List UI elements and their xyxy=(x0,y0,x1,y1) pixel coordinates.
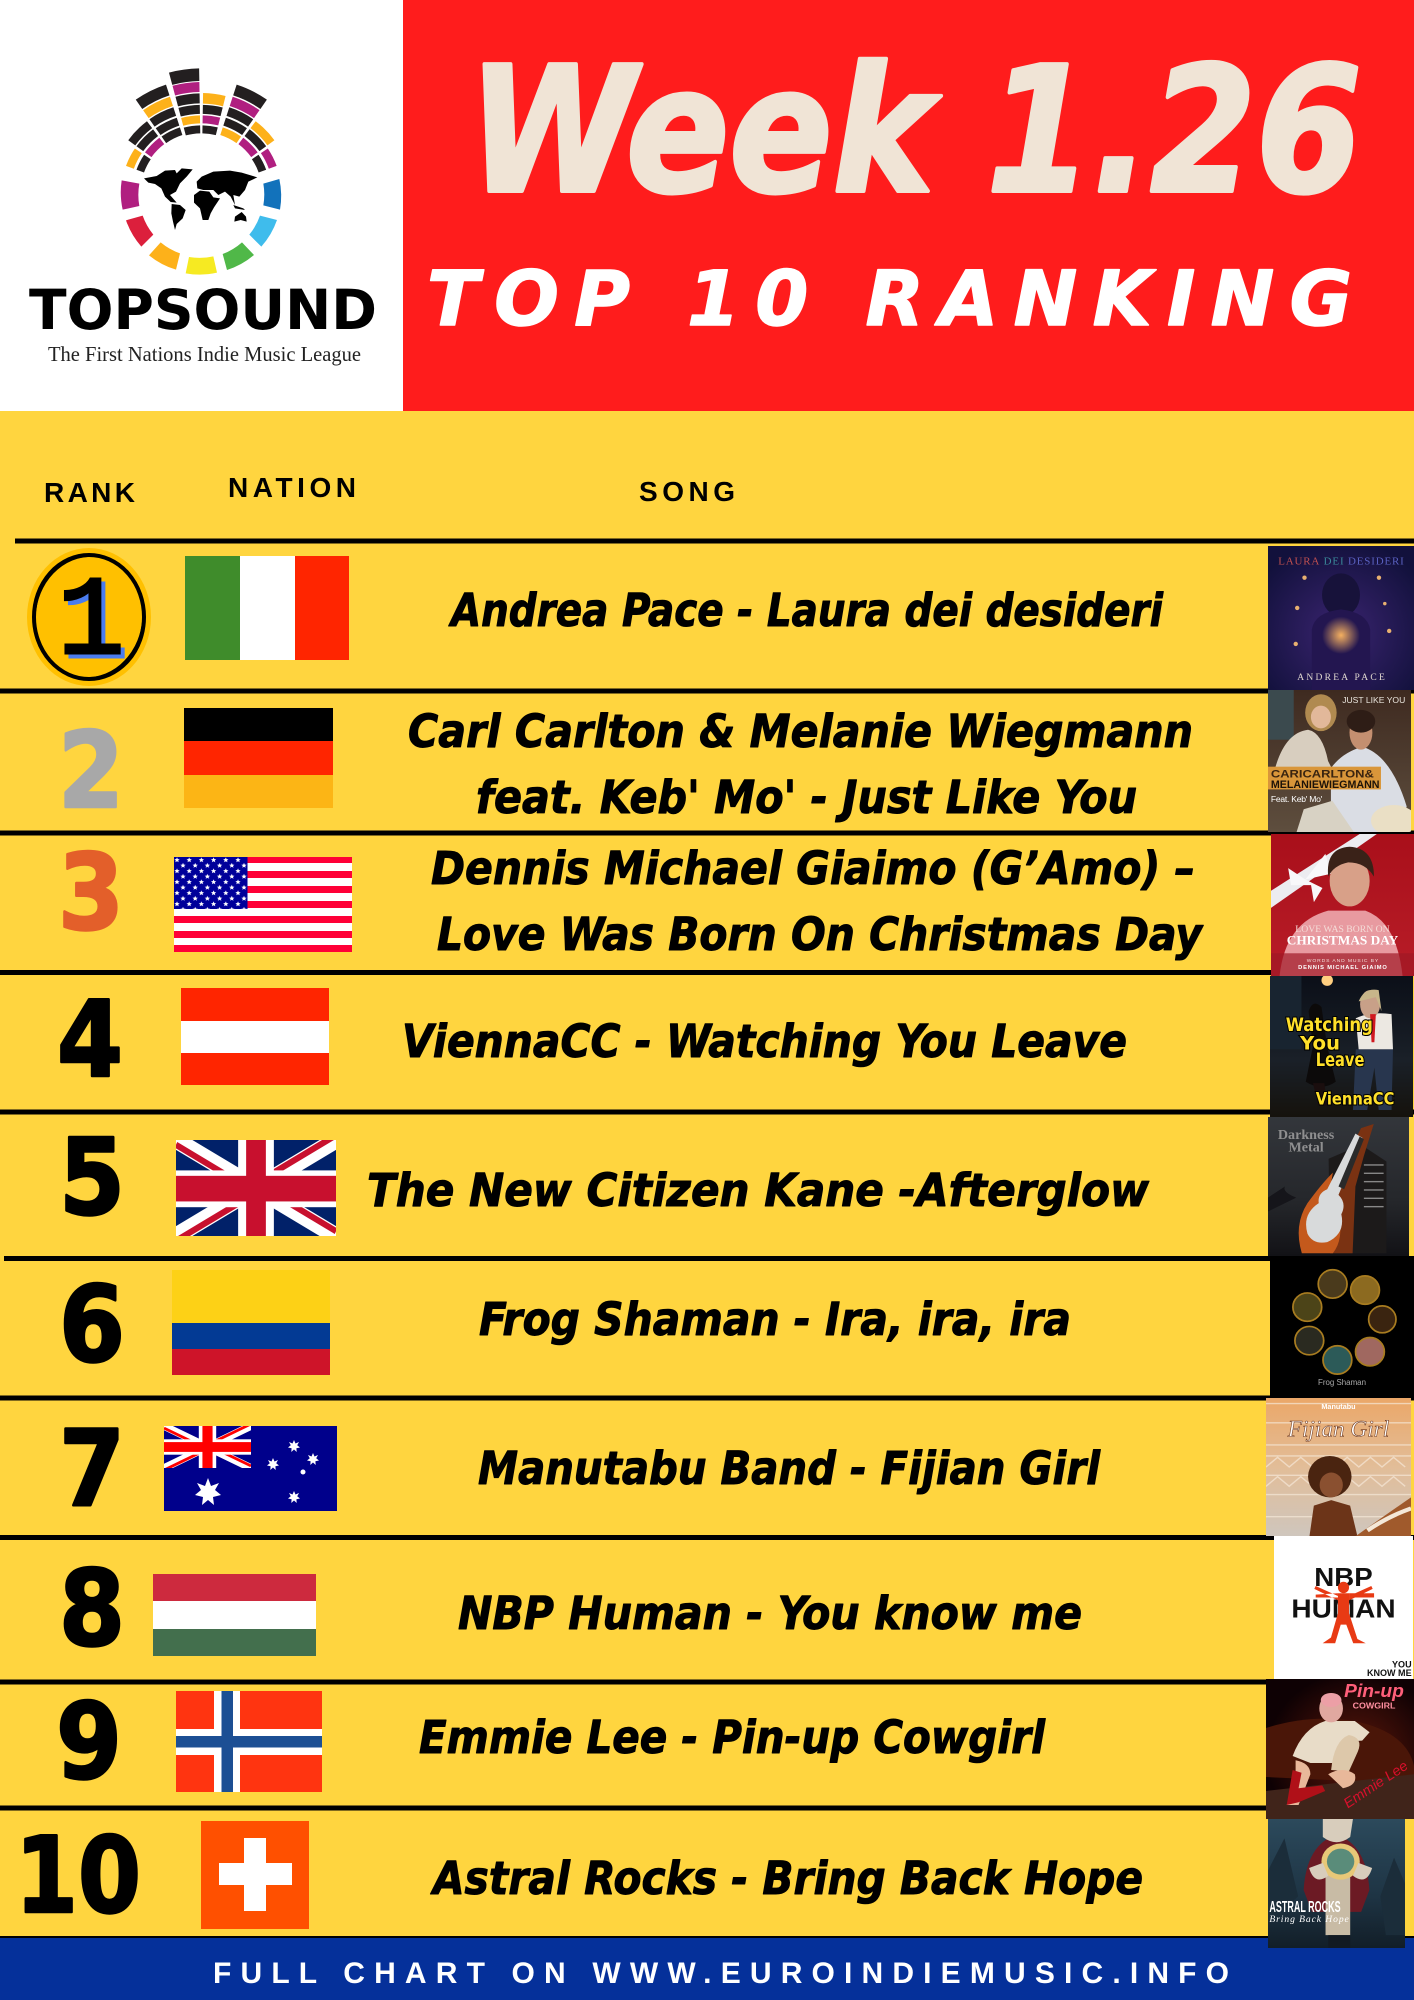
rank 8: 8 xyxy=(59,1548,125,1670)
song 10: Astral Rocks - Bring Back Hope xyxy=(430,1852,1143,1905)
album cover 4: Watching You Leave xyxy=(1270,976,1413,1117)
flag: Hungary xyxy=(153,1574,316,1656)
flag: Italy xyxy=(185,556,349,660)
album cover 3: Love Was Born On Christmas Day: CHRISTMAS DAY xyxy=(1287,934,1399,948)
album cover 5: Afterglow: Darkness xyxy=(1278,1128,1335,1143)
rank 1 badge xyxy=(27,548,151,691)
song 7: Manutabu Band - Fijian Girl xyxy=(478,1442,1101,1495)
song 8: NBP Human - You know me xyxy=(458,1587,1082,1640)
song 2 xyxy=(408,705,1193,824)
album cover 3: Love Was Born On Christmas Day: LOVE WAS BORN ON xyxy=(1295,925,1390,935)
footer text: FULL CHART ON WWW.EUROINDIEMUSIC.INFO xyxy=(213,1957,1229,1990)
album cover 1: Laura dei desideri: ANDREA PACE xyxy=(1297,673,1385,683)
ring segments xyxy=(121,179,281,275)
flag: United Kingdom xyxy=(176,1140,336,1236)
album cover 4: Watching You Leave: Leave xyxy=(1316,1050,1364,1071)
rank 4: 4 xyxy=(57,979,123,1101)
song 3: Dennis Michael Giaimo (G’Amo) – xyxy=(431,842,1195,895)
subtitle: TOP 10 RANKING xyxy=(427,254,1352,343)
tagline: The First Nations Indie Music League xyxy=(48,342,361,366)
album cover 7: Fijian Girl xyxy=(1266,1398,1411,1536)
flag: Australia xyxy=(164,1424,337,1511)
album cover 2: Just Like You: JUST LIKE YOU xyxy=(1342,695,1405,705)
album cover 4: Watching You Leave: Watching xyxy=(1286,1015,1373,1036)
album cover 6: Ira, ira, ira: Frog Shaman xyxy=(1318,1378,1366,1387)
heading: nation: NATION xyxy=(228,472,356,503)
album cover 2: Just Like You: Feat. Keb' Mo' xyxy=(1271,794,1323,804)
album cover 9: Pin-up Cowgirl xyxy=(1266,1679,1414,1819)
album cover 2: Just Like You: MELANIEWIEGMANN xyxy=(1271,779,1380,791)
rank 5: 5 xyxy=(59,1117,125,1239)
album cover 8: You know me: KNOW ME xyxy=(1367,1668,1412,1678)
album cover 8: You know me xyxy=(1274,1536,1413,1679)
song 2: Carl Carlton & Melanie Wiegmann xyxy=(408,705,1193,758)
rank 7: 7 xyxy=(59,1408,125,1530)
album cover 7: Fijian Girl: Fijian Girl xyxy=(1287,1417,1390,1442)
album cover 8: You know me: NBP xyxy=(1314,1564,1373,1592)
flag: Colombia xyxy=(172,1270,330,1375)
heading: song: SONG xyxy=(639,476,735,507)
flag: Norway xyxy=(176,1691,322,1792)
song 4: ViennaCC - Watching You Leave xyxy=(402,1015,1127,1068)
album cover 9: Pin-up Cowgirl: COWGIRL xyxy=(1353,1701,1395,1710)
album cover 3: Love Was Born On Christmas Day: WORDS AND MUSIC BY xyxy=(1307,958,1379,964)
world map xyxy=(144,168,257,230)
song 5: The New Citizen Kane -Afterglow xyxy=(367,1164,1149,1217)
flag: USA xyxy=(174,857,352,952)
rank 3: 3 xyxy=(58,832,124,954)
rank 9: 9 xyxy=(56,1681,122,1803)
album cover 2: Just Like You xyxy=(1268,690,1411,832)
album cover 8: You know me: HUMAN xyxy=(1291,1595,1396,1624)
album cover 3: Love Was Born On Christmas Day xyxy=(1271,834,1414,976)
album cover 3: Love Was Born On Christmas Day: DENNIS MICHAEL GIAIMO xyxy=(1298,965,1387,971)
song 1: Andrea Pace - Laura dei desideri xyxy=(448,584,1163,637)
wordmark: TOPSOUND xyxy=(29,278,377,342)
song 6: Frog Shaman - Ira, ira, ira xyxy=(479,1293,1071,1346)
panel: title banner xyxy=(403,0,1414,411)
song 2: feat. Keb' Mo' - Just Like You xyxy=(476,771,1137,824)
album cover 4: Watching You Leave: You xyxy=(1299,1033,1340,1054)
song 3 xyxy=(431,842,1204,961)
album cover 5: Afterglow: Metal xyxy=(1288,1141,1324,1156)
panel: logo xyxy=(0,0,403,411)
rank 6: 6 xyxy=(59,1264,125,1386)
rank 2: 2 xyxy=(58,710,124,832)
footer xyxy=(0,1938,1414,2000)
rank 10: 10 xyxy=(15,1815,141,1937)
flag: Switzerland xyxy=(201,1821,309,1929)
song 3: Love Was Born On Christmas Day xyxy=(437,908,1204,961)
song 9: Emmie Lee - Pin-up Cowgirl xyxy=(419,1711,1046,1764)
album cover 1: Laura dei desideri xyxy=(1268,546,1414,690)
rank 1 badge: 1 xyxy=(61,564,129,691)
album cover 10: Bring Back Hope: Bring Back Hope xyxy=(1269,1915,1349,1925)
heading: rank: RANK xyxy=(44,477,135,508)
album cover 1: Laura dei desideri: LAURA DEI DESIDERI xyxy=(1278,556,1404,568)
flag: Germany xyxy=(184,708,333,808)
album cover 9: Pin-up Cowgirl: Pin-up xyxy=(1344,1681,1404,1701)
row dividers xyxy=(0,538,1414,1938)
album cover 10: Bring Back Hope: ASTRAL ROCKS xyxy=(1269,1899,1341,1916)
album cover 4: Watching You Leave: ViennaCC xyxy=(1316,1089,1394,1109)
album cover 9: Pin-up Cowgirl: Emmie Lee xyxy=(1341,1758,1411,1812)
album cover 10: Bring Back Hope xyxy=(1268,1819,1405,1948)
album cover 7: Fijian Girl: Manutabu xyxy=(1321,1404,1356,1411)
album cover 8: You know me: YOU xyxy=(1392,1659,1412,1670)
flag: Austria xyxy=(181,988,329,1085)
equalizer bars xyxy=(50,42,353,345)
table headers xyxy=(44,472,735,508)
album cover 5: Afterglow xyxy=(1268,1117,1409,1256)
album cover 6: Ira, ira, ira xyxy=(1270,1261,1414,1396)
icon: topsound logo mark xyxy=(50,42,353,345)
album cover 2: Just Like You: CARICARLTON& xyxy=(1271,768,1374,780)
rank 1 badge: 1 xyxy=(57,560,125,687)
